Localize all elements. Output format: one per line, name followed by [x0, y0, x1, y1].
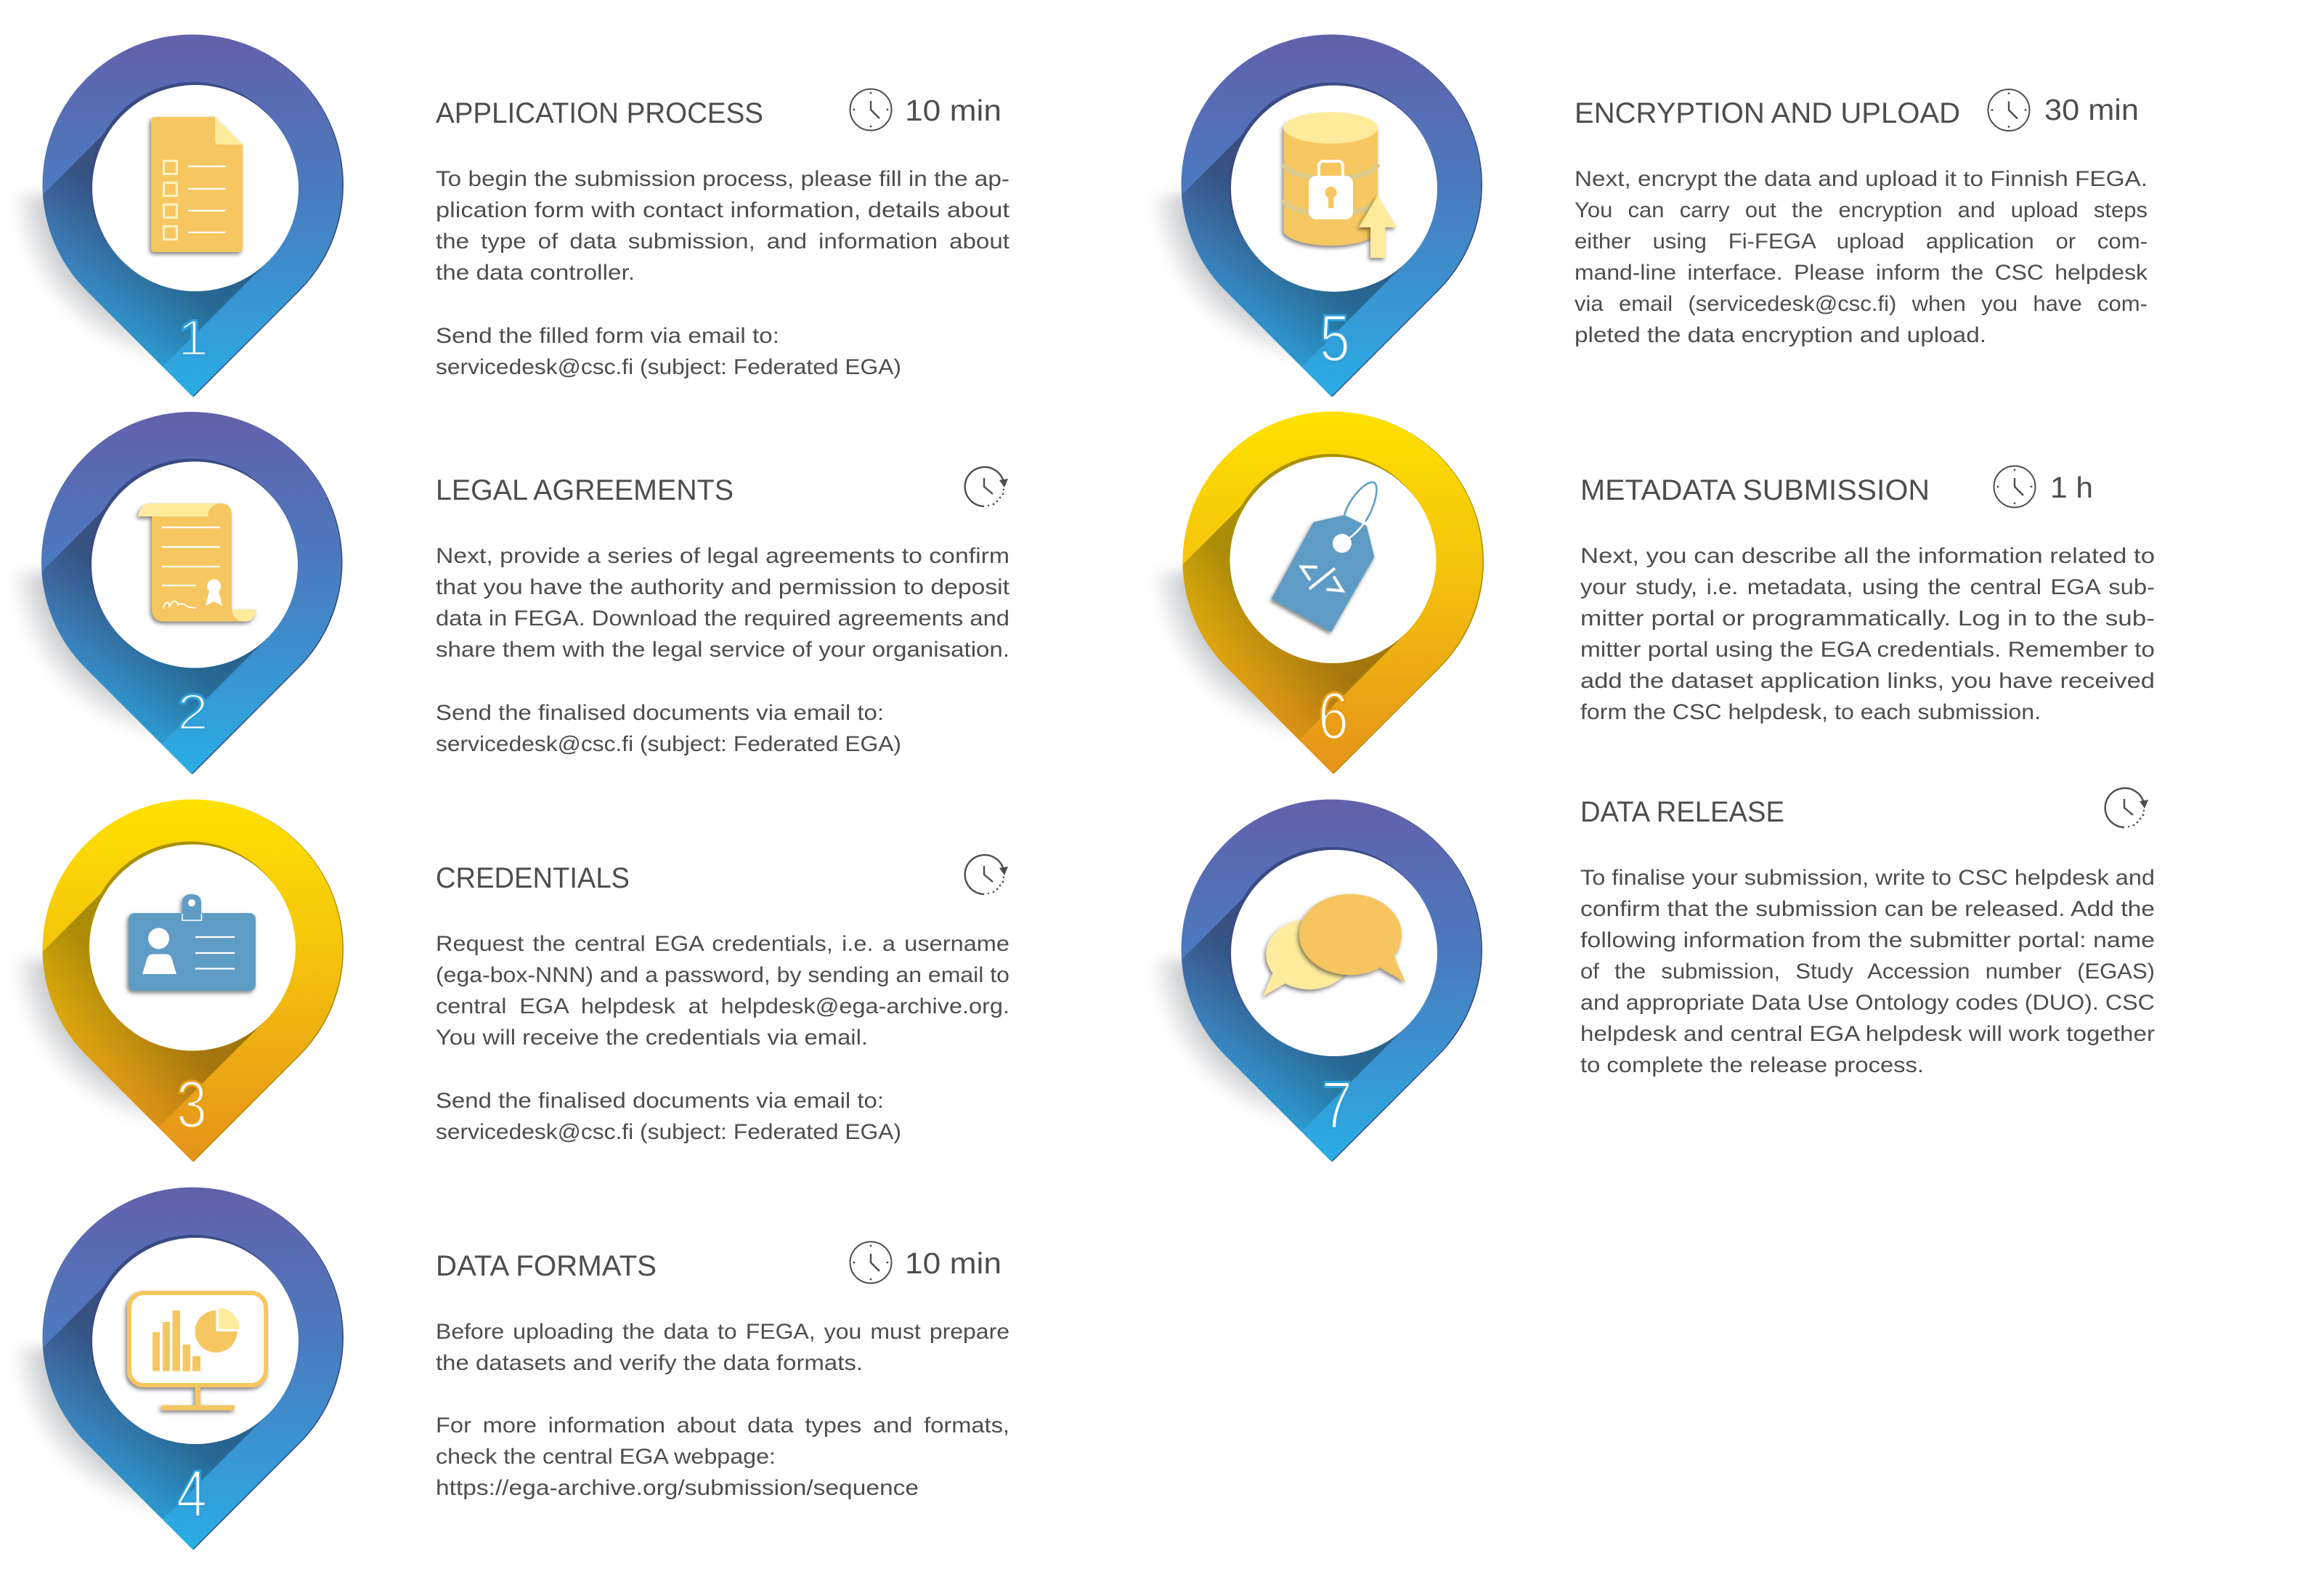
body text: Before uploading the data to FEGA, you must prepare: [436, 1320, 1009, 1344]
body text: to complete the release process.: [1580, 1053, 1924, 1077]
pin 3: credentials: [17, 799, 344, 1162]
step number 5: 5: [1320, 301, 1350, 376]
heading: APPLICATION PROCESS: [436, 97, 763, 129]
body text: mitter portal or programmatically. Log in to the sub-: [1580, 607, 2155, 631]
icon: metadata tag: [1272, 482, 1376, 632]
icon: monitor with charts: [129, 1293, 266, 1411]
heading: DATA RELEASE: [1580, 796, 1784, 828]
body text: [436, 167, 1009, 379]
step number 4: 4: [176, 1456, 207, 1531]
body text: [436, 544, 1009, 756]
body text: Request the central EGA credentials, i.e. a username: [436, 932, 1009, 956]
heading: LEGAL AGREEMENTS: [436, 474, 734, 506]
body text: central EGA helpdesk at helpdesk@ega-archive.org.: [436, 994, 1009, 1018]
body text: share them with the legal service of your organisation.: [436, 638, 1009, 662]
icon: locked database with upload arrow: [1284, 112, 1397, 258]
body text: [1580, 544, 2155, 724]
body text: You will receive the credentials via email.: [436, 1026, 868, 1050]
body text: servicedesk@csc.fi (subject: Federated EGA): [436, 732, 901, 756]
body text: Next, encrypt the data and upload it to Finnish FEGA.: [1575, 167, 2148, 191]
body text: Send the finalised documents via email to:: [436, 701, 884, 725]
pin 1: application process: [17, 35, 344, 397]
body text: of the submission, Study Accession number (EGAS): [1580, 960, 2155, 984]
body text: plication form with contact information, details about: [436, 198, 1009, 222]
body text: Send the finalised documents via email to:: [436, 1089, 884, 1113]
body text: To finalise your submission, write to CSC helpdesk and: [1580, 866, 2155, 890]
step number 2: 2: [177, 683, 208, 740]
pin 6: metadata submission: [1157, 411, 1484, 774]
step 1 text: [436, 89, 1009, 379]
duration: 10 min: [905, 1246, 1001, 1280]
body text: [1580, 866, 2155, 1077]
heading: DATA FORMATS: [436, 1250, 657, 1282]
body text: via email (servicedesk@csc.fi) when you have com-: [1575, 292, 2148, 316]
body text: data in FEGA. Download the required agreements and: [436, 607, 1009, 631]
body text: your study, i.e. metadata, using the central EGA sub-: [1580, 575, 2155, 599]
body text: servicedesk@csc.fi (subject: Federated EGA): [436, 1120, 901, 1144]
body text: Next, provide a series of legal agreements to confirm: [436, 544, 1009, 568]
duration: 1 h: [2050, 471, 2093, 504]
icon: clock with arrow: [965, 855, 1008, 894]
pin 2: legal agreements: [16, 412, 343, 774]
body text: form the CSC helpdesk, to each submission.: [1580, 700, 2041, 724]
body text: mitter portal using the EGA credentials. Remember to: [1580, 638, 2155, 662]
body text: Next, you can describe all the information related to: [1580, 544, 2155, 568]
step 4 text: [436, 1242, 1009, 1500]
icon: clock with arrow: [965, 467, 1008, 506]
heading: ENCRYPTION AND UPLOAD: [1575, 97, 1960, 129]
step number 6: 6: [1318, 678, 1349, 753]
icon: ID badge: [129, 894, 256, 991]
icon: clock: [850, 1242, 892, 1283]
icon: clock: [1994, 466, 2035, 507]
icon: legal scroll: [138, 503, 256, 622]
body text: To begin the submission process, please fill in the ap-: [436, 167, 1009, 191]
body text: pleted the data encryption and upload.: [1575, 323, 1986, 347]
body text: You can carry out the encryption and upload steps: [1575, 198, 2148, 222]
body text: the type of data submission, and information about: [436, 230, 1009, 254]
pin 5: encryption and upload: [1155, 35, 1482, 397]
body text: check the central EGA webpage:: [436, 1445, 776, 1469]
pin 7: data release: [1156, 799, 1482, 1162]
body text: and appropriate Data Use Ontology codes (DUO). CSC: [1580, 991, 2155, 1015]
body text: [1575, 167, 2148, 347]
icon: clock with arrow: [2105, 788, 2148, 827]
icon: speech bubbles: [1263, 894, 1405, 996]
icon: clock: [1988, 89, 2029, 131]
icon: form document: [151, 117, 243, 252]
body text: For more information about data types and formats,: [436, 1414, 1009, 1438]
step number 7: 7: [1322, 1068, 1352, 1143]
duration: 30 min: [2044, 93, 2139, 126]
step 5 text: [1575, 89, 2148, 347]
body text: that you have the authority and permission to deposit: [436, 575, 1009, 599]
step 6 text: [1580, 466, 2155, 724]
step number 3: 3: [176, 1067, 207, 1142]
body text: [436, 932, 1009, 1144]
body text: mand-line interface. Please inform the CSC helpdesk: [1575, 261, 2148, 285]
body text: the datasets and verify the data formats.: [436, 1351, 863, 1375]
body text: following information from the submitter portal: name: [1580, 928, 2155, 952]
step 7 text: [1580, 788, 2155, 1077]
step 3 text: [436, 855, 1009, 1144]
body text: https://ega-archive.org/submission/sequence: [436, 1476, 919, 1500]
body text: (ega-box-NNN) and a password, by sending an email to: [436, 963, 1009, 987]
body text: Send the filled form via email to:: [436, 324, 779, 348]
step number 1: 1: [178, 309, 208, 366]
body text: the data controller.: [436, 261, 635, 285]
body text: servicedesk@csc.fi (subject: Federated EGA): [436, 355, 901, 379]
body text: confirm that the submission can be released. Add the: [1580, 897, 2155, 921]
icon: clock: [850, 89, 892, 131]
heading: CREDENTIALS: [436, 862, 630, 894]
body text: [436, 1320, 1009, 1500]
heading: METADATA SUBMISSION: [1580, 474, 1930, 506]
duration: 10 min: [905, 94, 1001, 127]
body text: add the dataset application links, you have received: [1580, 669, 2155, 693]
body text: either using Fi-FEGA upload application or com-: [1575, 230, 2148, 254]
body text: helpdesk and central EGA helpdesk will work together: [1580, 1022, 2155, 1046]
pin 4: data formats: [17, 1187, 344, 1550]
step 2 text: [436, 467, 1009, 756]
